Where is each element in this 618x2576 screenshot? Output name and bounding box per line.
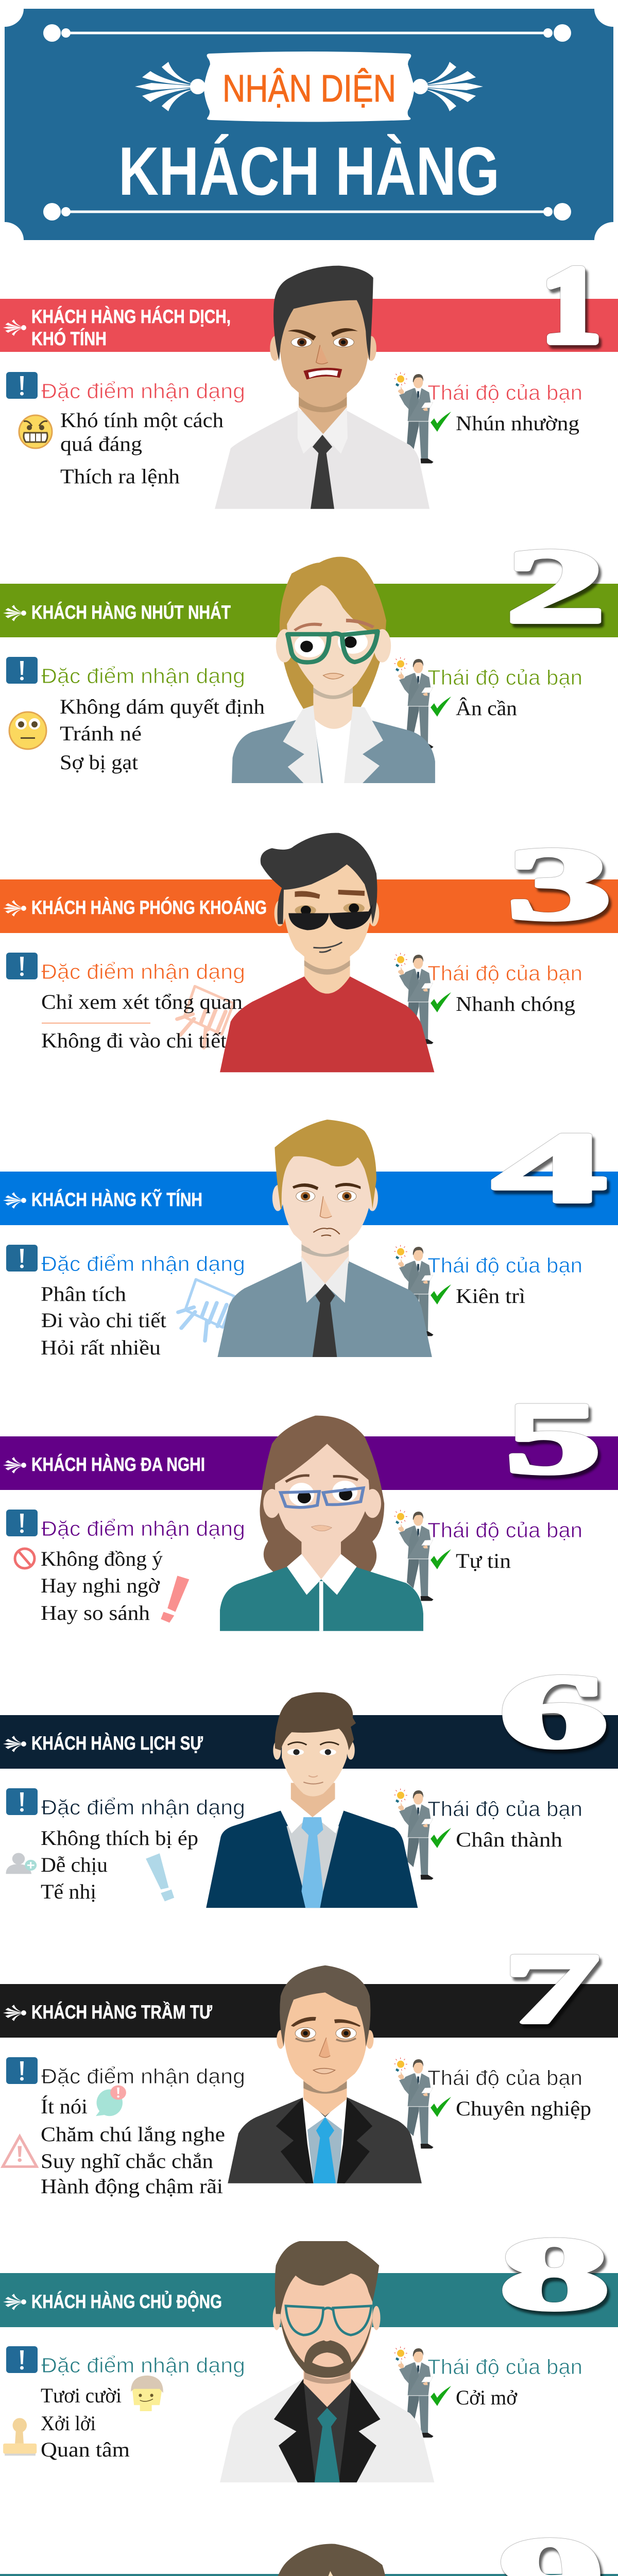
no sign icon: [15, 1549, 35, 1568]
traits list: Quan tâm: [41, 2438, 130, 2461]
traits list: Hay so sánh: [41, 1601, 150, 1624]
ornament: [3, 319, 26, 336]
traits list: Không đi vào chi tiết: [41, 1029, 227, 1052]
heading traits: Đặc điểm nhận dạng: [41, 664, 245, 688]
section title: KHÁCH HÀNG TRẦM TƯ: [31, 2002, 212, 2023]
traits list: [41, 2384, 130, 2461]
traits list: Ít nói: [41, 2095, 88, 2118]
attitude answer: Chân thành: [456, 1828, 562, 1851]
warning triangle icon: [3, 2137, 37, 2166]
alert icon: [6, 372, 38, 399]
attitude answer: Nhún nhường: [456, 412, 579, 435]
character: suspicious woman: [220, 1416, 423, 1631]
heading traits: Đặc điểm nhận dạng: [41, 379, 245, 403]
character: shy woman: [232, 557, 435, 783]
traits list: Dễ chịu: [41, 1853, 108, 1876]
traits list: Tươi cười: [41, 2384, 122, 2407]
alert icon: [6, 2346, 38, 2373]
section title: KHÁCH HÀNG KỸ TÍNH: [31, 1189, 202, 1210]
heading attitude: Thái độ của bạn: [427, 961, 582, 985]
traits list: [60, 409, 224, 488]
traits list: [41, 2095, 225, 2198]
check mark: [431, 1549, 451, 1569]
mini salesman: [394, 2058, 434, 2148]
alert icon: [6, 657, 38, 684]
attitude answer: Tự tin: [456, 1549, 511, 1572]
character: easy-going man with sunglasses: [220, 833, 434, 1072]
attitude answer: Cởi mở: [456, 2386, 518, 2409]
section 7: khách hàng trầm tư: [0, 1933, 618, 2198]
attitude answer: Nhanh chóng: [456, 992, 575, 1015]
section title: KHÁCH HÀNG ĐA NGHI: [31, 1454, 205, 1475]
check mark: [431, 1284, 451, 1304]
heading traits: Đặc điểm nhận dạng: [41, 2353, 245, 2377]
heading attitude: Thái độ của bạn: [427, 2355, 582, 2379]
mini salesman: [394, 657, 434, 748]
traits list: Không đồng ý: [41, 1547, 163, 1570]
heading attitude: Thái độ của bạn: [427, 2066, 582, 2090]
traits list: Sợ bị gạt: [60, 751, 138, 774]
traits list: Không thích bị ép: [41, 1826, 198, 1850]
mini salesman: [394, 2347, 434, 2437]
stamp icon: [3, 2418, 37, 2455]
heading traits: Đặc điểm nhận dạng: [41, 1795, 245, 1819]
section title: KHÁCH HÀNG CHỦ ĐỘNG: [31, 2291, 222, 2312]
traits list: Khó tính một cách: [60, 409, 224, 432]
band: [0, 1984, 618, 2038]
character: bearded man: [220, 2241, 434, 2482]
alert icon: [6, 2057, 38, 2084]
heading attitude: Thái độ của bạn: [427, 1253, 582, 1277]
section 5: khách hàng đa nghi: [0, 1382, 618, 1631]
traits list: Thích ra lệnh: [60, 465, 180, 488]
character: polite man: [206, 1692, 418, 1908]
traits list: Tránh né: [60, 722, 142, 745]
section 3: khách hàng phóng khoáng: [0, 827, 618, 1072]
emoji worried: [9, 712, 46, 749]
check mark: [431, 2097, 451, 2117]
traits list: [41, 990, 243, 1052]
traits list: Không dám quyết định: [60, 695, 265, 718]
traits list: quá đáng: [60, 432, 142, 455]
character: pensive man: [228, 1965, 422, 2183]
check mark: [431, 2386, 451, 2406]
emoji angry: [19, 415, 52, 448]
right tassel: [413, 62, 483, 111]
band: [0, 879, 618, 933]
panel background with notched corners: [5, 9, 613, 240]
traits list: [41, 1282, 166, 1359]
traits list: Hay nghi ngờ: [41, 1574, 160, 1597]
character: angry man: [215, 266, 430, 509]
number 4: 4: [492, 1112, 607, 1224]
alert icon: [6, 1510, 38, 1536]
mini salesman: [394, 1510, 434, 1601]
heading attitude: Thái độ của bạn: [427, 666, 582, 689]
alert icon: [6, 1788, 38, 1815]
traits list: Tế nhị: [41, 1880, 96, 1903]
section title: KHÁCH HÀNG LỊCH SỰ: [31, 1733, 203, 1754]
section title: KHÓ TÍNH: [31, 328, 107, 349]
band: [0, 1715, 618, 1769]
alert icon: [6, 953, 38, 979]
heading attitude: Thái độ của bạn: [427, 1797, 582, 1821]
mini salesman: [394, 953, 434, 1044]
bottom ornament line: [43, 203, 571, 221]
number 5: 5: [505, 1382, 601, 1495]
chat bubble icon: [96, 2086, 126, 2116]
attitude answer: Chuyên nghiệp: [456, 2097, 591, 2120]
traits list: Xởi lởi: [41, 2412, 96, 2435]
character: meticulous man: [217, 1120, 432, 1357]
attitude answer: Ân cần: [456, 697, 517, 720]
ornament: [3, 1457, 26, 1473]
alert icon: [6, 1245, 38, 1272]
ornament: [3, 1192, 26, 1209]
heading traits: Đặc điểm nhận dạng: [41, 960, 245, 984]
ornament: [3, 2294, 26, 2310]
heading traits: Đặc điểm nhận dạng: [41, 1517, 245, 1540]
ornament: [3, 1736, 26, 1752]
user plus icon: [6, 1853, 37, 1874]
mini salesman: [394, 1245, 434, 1336]
section title: [31, 306, 231, 349]
section title: KHÁCH HÀNG PHÓNG KHOÁNG: [31, 896, 267, 918]
easel icon faded: [178, 1279, 234, 1341]
band: [0, 1172, 618, 1225]
heading attitude: Thái độ của bạn: [427, 1518, 582, 1542]
number 1: 1: [541, 244, 601, 365]
traits list: [60, 695, 265, 774]
band: [0, 2273, 618, 2327]
mini salesman: [394, 1789, 434, 1879]
traits list: Phân tích: [41, 1282, 126, 1306]
section 2: khách hàng nhút nhát: [0, 527, 618, 783]
traits list: Chỉ xem xét tổng quan: [41, 990, 243, 1013]
number 3: 3: [507, 827, 612, 941]
number 8: 8: [500, 2217, 610, 2331]
traits list: Hỏi rất nhiều: [41, 1336, 161, 1359]
ornament: [3, 900, 26, 917]
heading attitude: Thái độ của bạn: [427, 381, 582, 404]
mini salesman: [394, 372, 434, 463]
band: [0, 299, 618, 352]
toy head icon: [131, 2376, 163, 2411]
check mark: [431, 1828, 451, 1848]
title line 2: KHÁCH HÀNG: [118, 133, 500, 210]
band: [0, 2574, 618, 2576]
number 7: 7: [504, 1933, 599, 2044]
check mark: [431, 412, 451, 432]
section title: KHÁCH HÀNG NHÚT NHÁT: [31, 601, 231, 623]
ornament: [3, 2005, 26, 2021]
title plate: [204, 52, 415, 122]
band: [0, 1436, 618, 1490]
top ornament line: [43, 24, 571, 42]
traits list: Chăm chú lắng nghe: [41, 2123, 225, 2146]
traits list: Suy nghĩ chắc chắn: [41, 2149, 213, 2173]
heading traits: Đặc điểm nhận dạng: [41, 2064, 245, 2088]
traits list: [41, 1826, 198, 1903]
section 1: khách hàng hách dịch, khó tính: [0, 244, 618, 509]
section title: KHÁCH HÀNG HÁCH DỊCH,: [31, 306, 231, 327]
traits list: [41, 1547, 163, 1624]
attitude answer: Kiên trì: [456, 1284, 525, 1308]
section 8: khách hàng chủ động: [0, 2217, 618, 2482]
check mark: [431, 992, 451, 1012]
pink exclamation: [161, 1575, 189, 1623]
character: hesitant woman: [227, 2544, 438, 2576]
traits list: Đi vào chi tiết: [41, 1309, 166, 1332]
title line 1: NHẬN DIỆN: [222, 67, 396, 110]
blue exclamation: [146, 1853, 174, 1902]
section 6: khách hàng lịch sự: [0, 1653, 618, 1908]
traits list: Hành động chậm rãi: [41, 2175, 223, 2198]
band: [0, 584, 618, 637]
left tassel: [135, 62, 205, 111]
easel icon faded: [177, 986, 233, 1047]
header panel: [5, 9, 613, 240]
section 4: khách hàng kỹ tính: [0, 1112, 618, 1359]
number 6: 6: [499, 1653, 608, 1770]
section 9: khách hàng do dự: [0, 2516, 618, 2576]
number 2: 2: [506, 527, 606, 645]
check mark: [431, 697, 451, 717]
heading traits: Đặc điểm nhận dạng: [41, 1252, 245, 1276]
ornament: [3, 605, 26, 621]
